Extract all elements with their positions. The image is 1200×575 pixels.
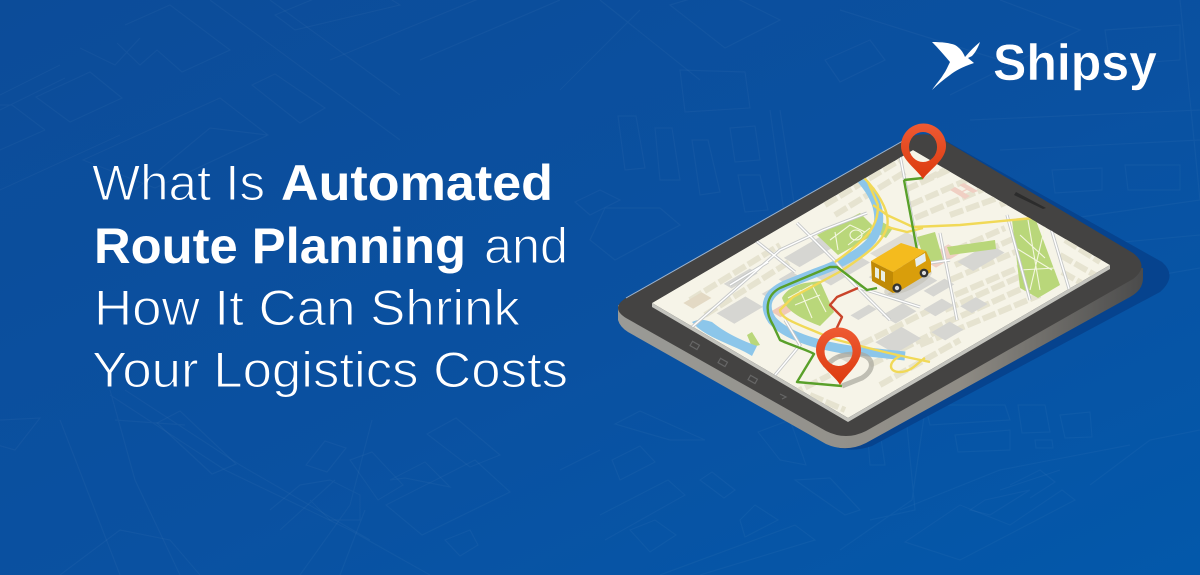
bezel rim highlight: [626, 138, 908, 298]
van side panel: [893, 251, 931, 293]
map: pin shadows: [825, 354, 871, 386]
screen depth edge: [652, 265, 1110, 422]
icon: delivery van: [871, 243, 935, 300]
logo: Shipsy: [932, 34, 1158, 91]
title: [92, 155, 568, 398]
title: Route Planning: [94, 218, 466, 274]
tablet illustration: [618, 124, 1170, 450]
tablet cast shadow: [838, 132, 1170, 450]
van rear windows: [875, 267, 879, 279]
map: green parks: [747, 213, 1060, 347]
title: Automated: [281, 155, 553, 211]
van rear: [871, 261, 893, 293]
map: green route: [768, 178, 923, 386]
map: red route: [830, 288, 858, 336]
map: park paths: [788, 220, 1055, 318]
van wheels: [892, 283, 902, 293]
tablet face bezel: [618, 134, 1142, 436]
icon: top location pin: [901, 124, 946, 179]
soft key icons: [690, 341, 786, 399]
wordmark: Shipsy: [993, 34, 1158, 91]
title: and: [484, 218, 568, 274]
map: yellow roads: [780, 160, 1033, 372]
title: What Is: [92, 155, 265, 211]
map: hospital mark: [950, 183, 978, 199]
title: How It Can Shrink: [94, 280, 521, 336]
icon: Shipsy bird mark: [932, 42, 980, 90]
map screen: [652, 150, 1110, 418]
map: water: [692, 178, 905, 356]
icon: bottom location pin: [816, 328, 861, 385]
tablet side edge: [618, 268, 1143, 448]
map: building rows: [690, 160, 1100, 410]
van roof: [871, 243, 926, 272]
map: grey building blocks: [684, 233, 1004, 362]
title: Your Logistics Costs: [92, 342, 568, 398]
map: grey roads: [675, 155, 1070, 375]
van windscreen: [915, 253, 926, 267]
speaker slot: [1014, 192, 1046, 209]
